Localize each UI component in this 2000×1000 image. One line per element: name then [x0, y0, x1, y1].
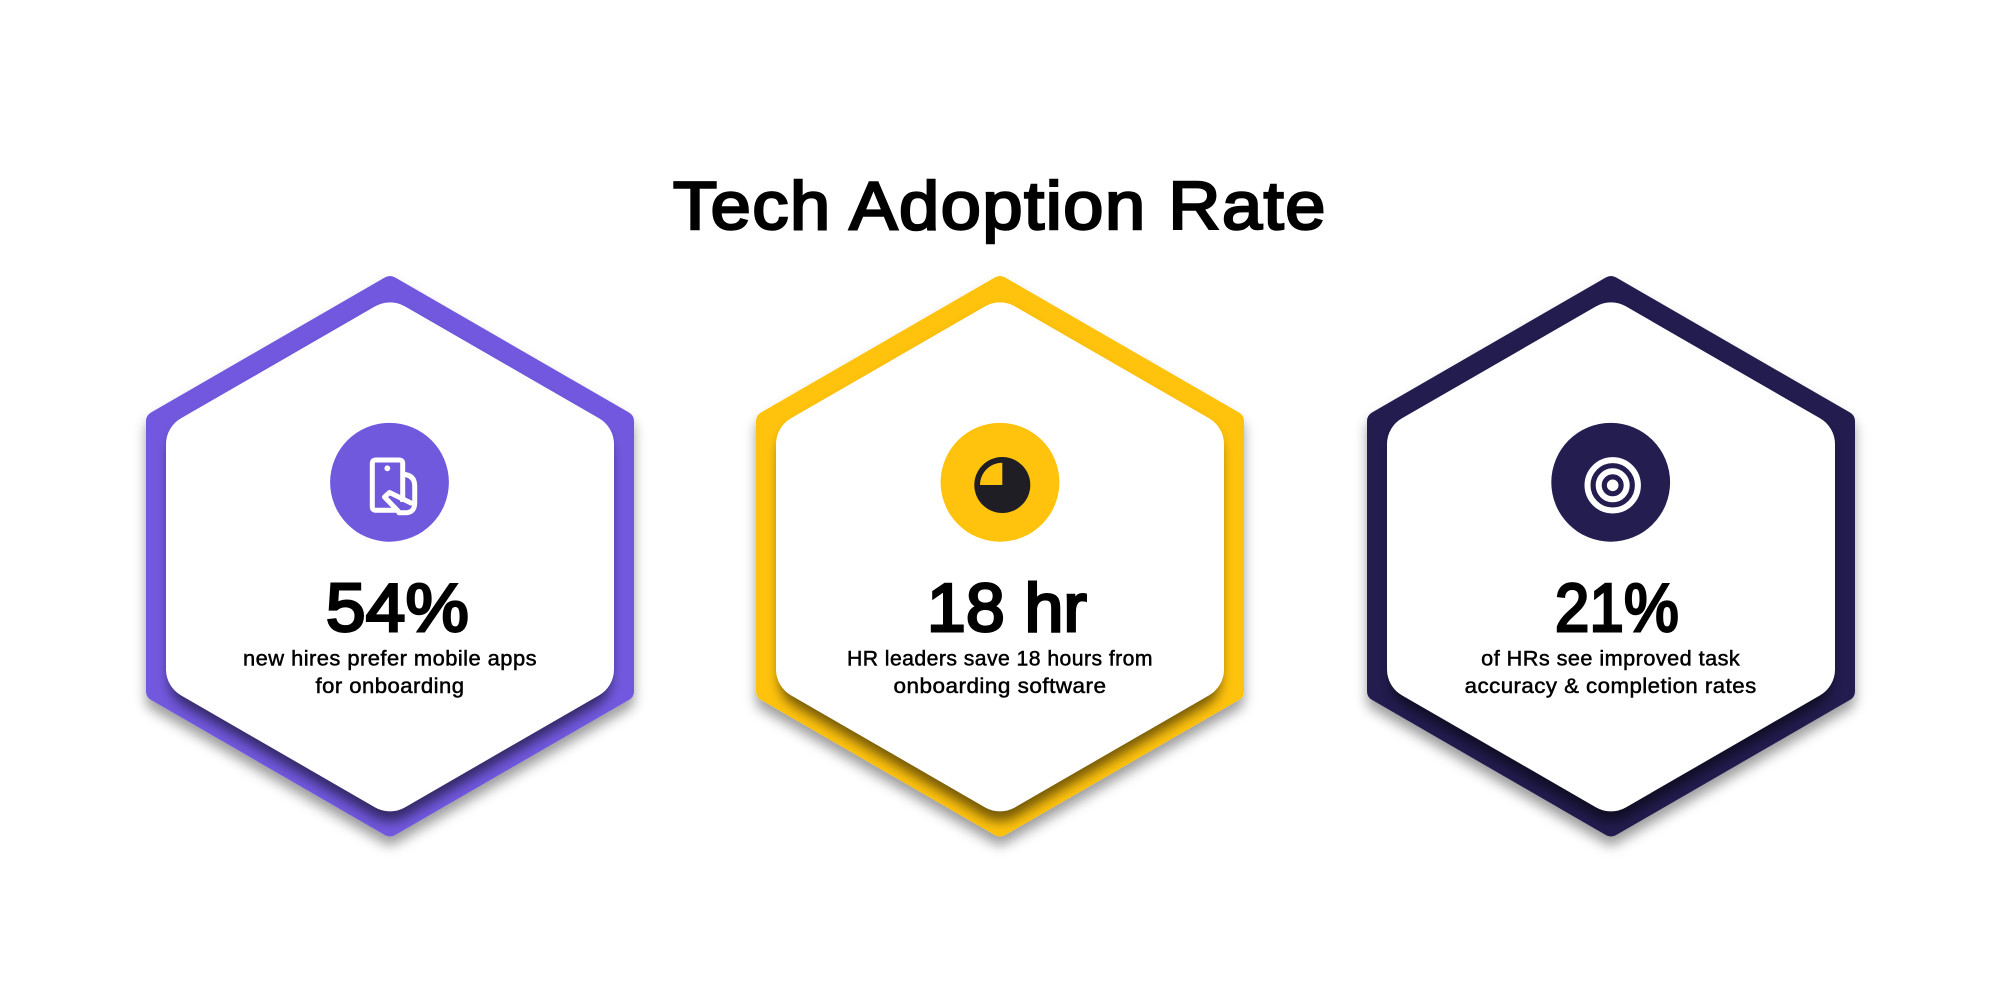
description: HR leaders save 18 hours from: [847, 647, 1153, 671]
hexagon frame: yellow: [756, 276, 1244, 836]
icon: pie clock: [941, 423, 1059, 542]
panel: time saved: [756, 276, 1244, 836]
stat: 54%: 54%: [326, 570, 469, 646]
description: new hires prefer mobile apps: [243, 647, 537, 671]
description: accuracy & completion rates: [1465, 674, 1757, 698]
title: Tech Adoption Rate: [673, 168, 1327, 244]
hexagon inner card: [1387, 302, 1835, 811]
icon: phone in hand: [330, 423, 449, 542]
panel: accuracy: [1367, 276, 1855, 836]
panel: mobile apps: [146, 276, 634, 836]
hexagon frame: purple: [146, 276, 634, 836]
description: for onboarding: [316, 674, 464, 698]
description: [1465, 647, 1757, 698]
description: [847, 647, 1153, 698]
description: [243, 647, 537, 698]
stat: 18 hr: 18 hr: [927, 570, 1087, 646]
hexagon inner card: [776, 302, 1224, 811]
stat: 21%: 21%: [1555, 570, 1679, 646]
description: of HRs see improved task: [1481, 647, 1740, 671]
icon: target: [1551, 423, 1670, 542]
description: onboarding software: [894, 674, 1106, 698]
hexagon inner card: [166, 302, 614, 811]
hexagon frame: navy: [1367, 276, 1855, 836]
